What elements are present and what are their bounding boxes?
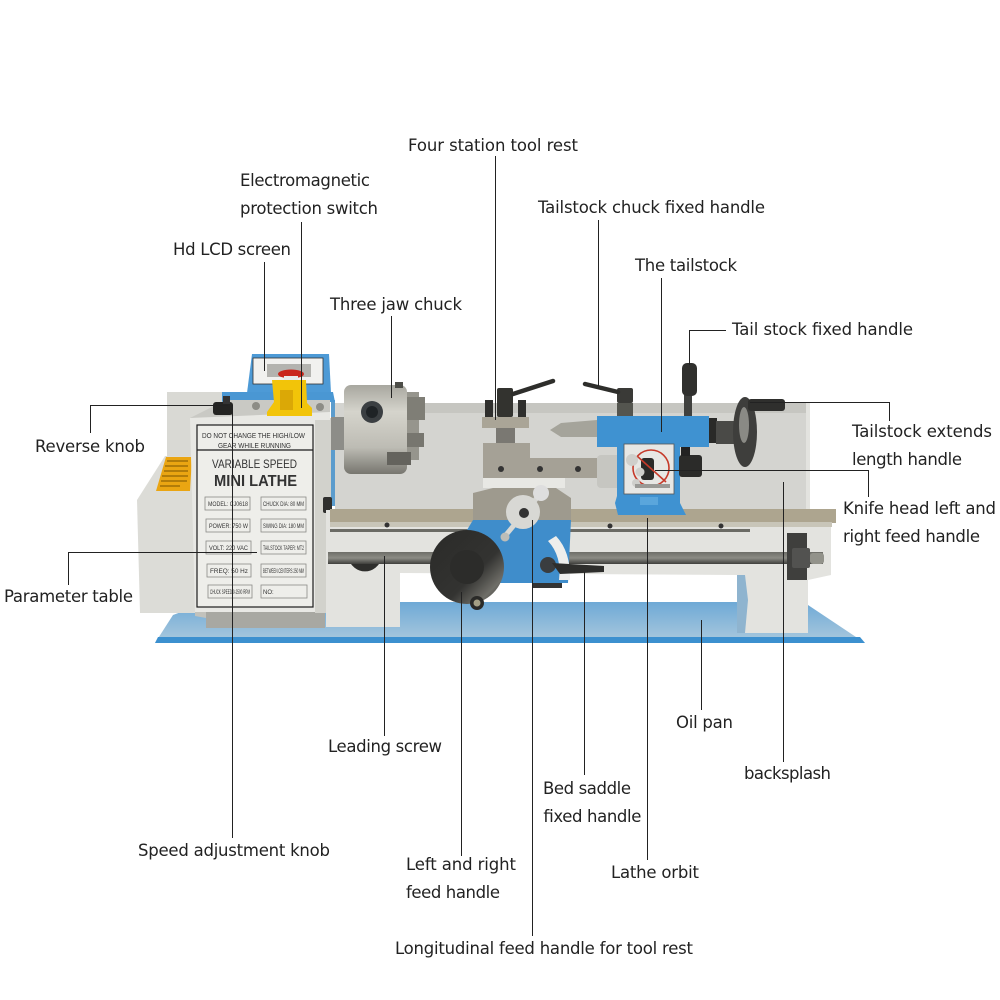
left and right feed handle [430, 530, 504, 610]
parameter table: CHUCK DIA: 80 MM [263, 502, 304, 508]
label: lathe orbit: Lathe orbit [611, 863, 700, 882]
tailstock chuck fixed handle [585, 384, 633, 416]
lathe orbit rail [330, 509, 836, 523]
half nut [348, 558, 382, 571]
label: parameter table: Parameter table [4, 587, 133, 606]
label: the tailstock: The tailstock [634, 256, 737, 275]
tailstock [550, 416, 709, 515]
LCD screen housing [190, 354, 335, 418]
label: oil pan: Oil pan [676, 713, 733, 732]
silver feed screw [597, 455, 628, 488]
parameter table: MODEL: CJ0618 [208, 502, 249, 508]
label: left and right: Left and right [406, 855, 517, 874]
parameter table: BETWEEN CENTERS 250 MM [263, 569, 304, 575]
three jaw chuck [331, 382, 425, 474]
label: three jaw chuck: Three jaw chuck [329, 295, 462, 314]
bed saddle fixed handle [540, 557, 604, 574]
parameter table: VOLT: 220 VAC [209, 546, 249, 552]
four station tool rest [482, 381, 597, 488]
parameter table: NO: [263, 590, 274, 596]
label: tailstock extends: Tailstock extends [851, 422, 992, 441]
parameter table: VARIABLE SPEED [212, 459, 297, 471]
warning sticker [156, 457, 192, 491]
parameter table: CHUCK SPEED 0-2500 RPM [210, 590, 250, 596]
tailstock extends length handle [709, 397, 785, 467]
headstock gearbox [137, 392, 332, 628]
bed saddle [467, 488, 571, 588]
electromagnetic protection switch [252, 370, 324, 416]
longitudinal feed handle [500, 485, 549, 542]
parameter table: FREQ: 50 Hz [210, 569, 248, 575]
label: reverse knob: Reverse knob [35, 437, 145, 456]
parameter table: SWING DIA: 180 MM [263, 524, 304, 530]
label: protection switch: protection switch [240, 199, 378, 218]
label: tail stock fixed handle: Tail stock fixed handle [731, 320, 913, 339]
reverse knob [213, 396, 233, 415]
backsplash [331, 400, 810, 512]
label: feed handle: feed handle [406, 883, 500, 902]
leader lines [68, 156, 890, 936]
label: leading screw: Leading screw [328, 737, 442, 756]
oil pan [155, 602, 865, 643]
label: electromagnetic: Electromagnetic [240, 171, 370, 190]
label: speed adjustment knob: Speed adjustment knob [138, 841, 330, 860]
tailstock center [550, 420, 597, 437]
bed and right leg [326, 509, 836, 633]
label: bed saddle: Bed saddle [543, 779, 631, 798]
label: four station tool rest: Four station tool rest [408, 136, 579, 155]
label: tailstock chuck fixed handle: Tailstock chuck fixed handle [537, 198, 765, 217]
parameter table: POWER: 750 W [209, 524, 248, 530]
tail stock fixed handle [682, 363, 697, 416]
parameter table: GEAR WHILE RUNNING [218, 441, 291, 450]
parameter table: TAILSTOCK TAPER: MT2 [263, 546, 304, 552]
label: length handle: length handle [852, 450, 962, 469]
label: fixed handle: fixed handle [543, 807, 641, 826]
label: right feed handle: right feed handle [843, 527, 980, 546]
label: backsplash: backsplash [744, 764, 831, 783]
leading screw [328, 533, 824, 580]
label: knife head left and: Knife head left and [843, 499, 996, 518]
parameter table [190, 400, 330, 612]
label: longitudinal feed handle for tool rest: Longitudinal feed handle for tool rest [395, 939, 694, 958]
parameter table: DO NOT CHANGE THE HIGH/LOW [202, 431, 306, 440]
parameter table: MINI LATHE [214, 473, 297, 490]
label: hd lcd screen: Hd LCD screen [173, 240, 291, 259]
